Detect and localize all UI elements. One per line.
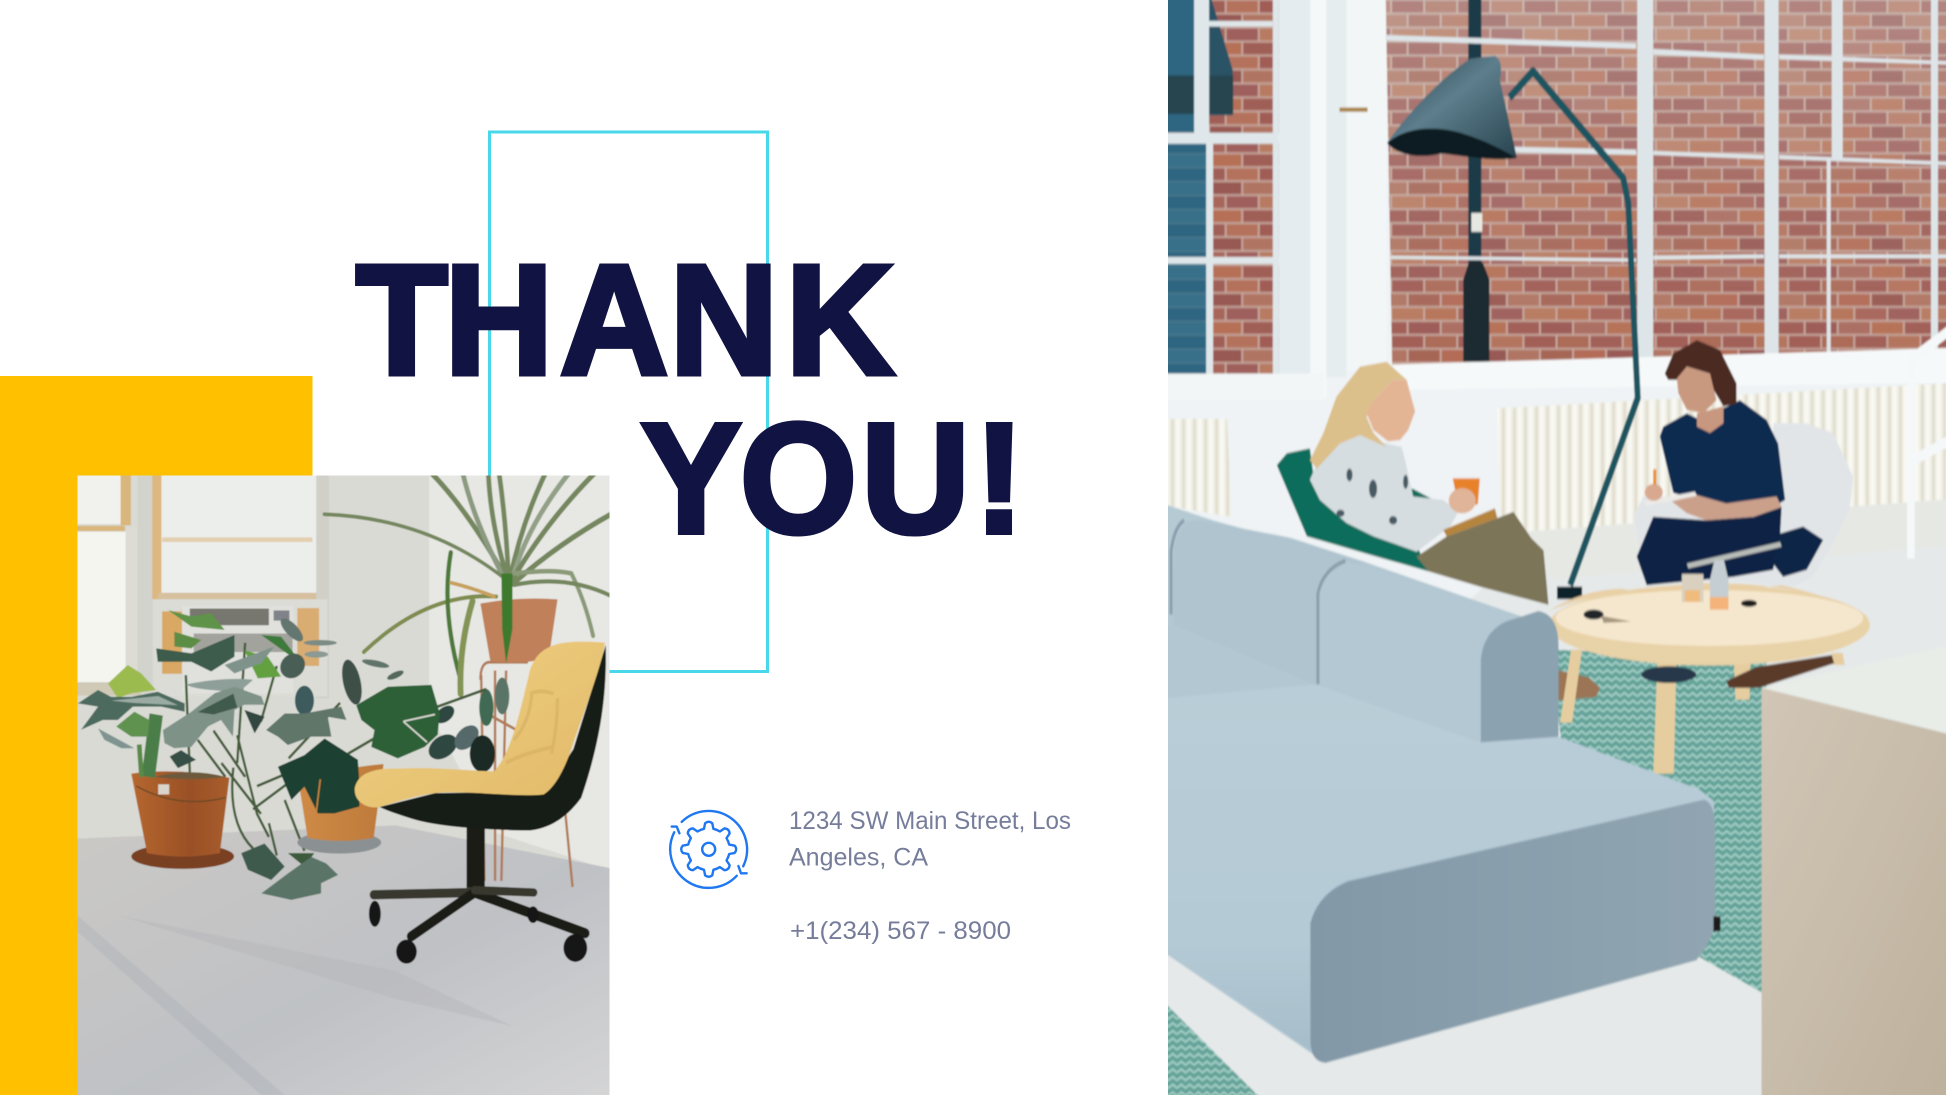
left radiator (1150, 419, 1231, 517)
large monstera right (356, 685, 440, 758)
mug (1453, 478, 1480, 508)
main window bricks (1386, 0, 1946, 365)
address and phone (789, 807, 1071, 945)
yellow cushion (355, 642, 605, 807)
left window bricks (1168, 0, 1279, 375)
large monstera lower (278, 739, 359, 813)
main seat top (1150, 684, 1714, 1051)
THANK: THANK (356, 232, 894, 408)
arm (1672, 495, 1782, 520)
notepad (1643, 492, 1697, 506)
coffee table (1548, 560, 1870, 774)
fallen leaves (241, 843, 338, 900)
plant stand (480, 662, 573, 887)
shoe (1559, 670, 1600, 700)
table rim (1549, 585, 1870, 666)
casters (369, 901, 587, 964)
shoes under the table (1641, 655, 1834, 688)
rubber plant leaves (280, 618, 304, 642)
floor lamp (1387, 56, 1638, 599)
rugs (1150, 649, 1767, 1095)
light green leaf (108, 665, 156, 698)
floor (59, 825, 621, 1095)
main window mullions (1386, 0, 1946, 360)
address and phone: Angeles, CA (789, 844, 928, 872)
arm end (1481, 611, 1559, 742)
face (1367, 380, 1415, 441)
main radiator (1497, 383, 1946, 534)
dark low leaf (170, 750, 196, 768)
address and phone: +1(234) 567 - 8900 (790, 917, 1011, 945)
stems (186, 643, 486, 855)
central hanging leaf (501, 573, 512, 664)
heading: THANK YOU! (356, 232, 1024, 566)
snake plant (148, 714, 156, 777)
silver right leaf (266, 707, 346, 745)
seat front face (1310, 800, 1715, 1063)
right side small leaves (425, 677, 509, 772)
staircase rail (1911, 325, 1946, 559)
street pole (1463, 0, 1489, 362)
pot two (297, 764, 384, 854)
top leaves (168, 610, 225, 630)
folder (1443, 508, 1497, 536)
small objects (1584, 600, 1757, 623)
office chair (355, 642, 606, 964)
contact block (670, 807, 1071, 945)
green chair (1277, 448, 1439, 571)
shirt print (1336, 469, 1408, 524)
left window (78, 476, 152, 696)
table top (1556, 590, 1863, 646)
hand with pen (1645, 469, 1663, 501)
shell (380, 645, 606, 831)
grey lower leaf (98, 728, 134, 748)
window recess and column (1150, 0, 1387, 400)
icon: gear with circular arrows (670, 811, 747, 888)
right window (152, 462, 329, 698)
hand (1449, 488, 1476, 513)
floor shadow streaks (78, 916, 285, 1095)
sofa base (1150, 499, 1715, 1063)
photo: meeting in bright loft (1150, 0, 1946, 1095)
monstera foliage (78, 610, 440, 813)
tall plant on stand (324, 473, 617, 887)
terracotta pot (480, 599, 558, 663)
cyan outline frame (490, 132, 768, 672)
trouser stripe (1687, 542, 1782, 568)
small green leaf (116, 712, 149, 737)
spider plant leaves (324, 473, 617, 694)
back cushion 1 (1174, 520, 1366, 686)
trousers (1637, 507, 1782, 585)
cream cabinet (1762, 644, 1946, 1095)
cushion tufting (506, 691, 558, 763)
photo: plants and yellow chair (59, 462, 621, 1095)
window sill (1392, 348, 1946, 390)
wall (78, 476, 590, 864)
table legs (1560, 649, 1845, 774)
YOU!: YOU! (641, 391, 1024, 566)
face (1677, 367, 1716, 413)
woman writing (1633, 340, 1853, 588)
grey armchair (1633, 423, 1853, 588)
cushion seams (1171, 520, 1345, 684)
seat foot (1713, 916, 1720, 932)
air conditioner (153, 599, 327, 696)
yellow accent block (0, 376, 312, 1095)
floor (1150, 545, 1946, 1095)
woman with mug (1277, 362, 1600, 700)
hair (1665, 340, 1736, 406)
shirt (1310, 435, 1458, 552)
left window mullions (1150, 0, 1283, 374)
pot one (131, 771, 234, 869)
lamp shade (1387, 56, 1517, 159)
light blue sofa (1150, 499, 1720, 1063)
glass and bottle (1682, 560, 1728, 610)
neck (1697, 406, 1723, 433)
far left cushion (1150, 499, 1213, 625)
silver left leaf (78, 690, 185, 730)
address and phone: 1234 SW Main Street, Los (789, 807, 1071, 835)
white wall (1168, 100, 1924, 598)
jacket on lap (1773, 527, 1823, 577)
trousers (1417, 512, 1548, 605)
navy top (1660, 400, 1785, 507)
table tray lip (1548, 583, 1870, 618)
white brick wall (429, 476, 610, 868)
back cushion 2 top and face (1316, 562, 1556, 742)
big silver centre leaf (163, 687, 265, 748)
base and stem (374, 825, 585, 936)
hair (1310, 362, 1407, 469)
